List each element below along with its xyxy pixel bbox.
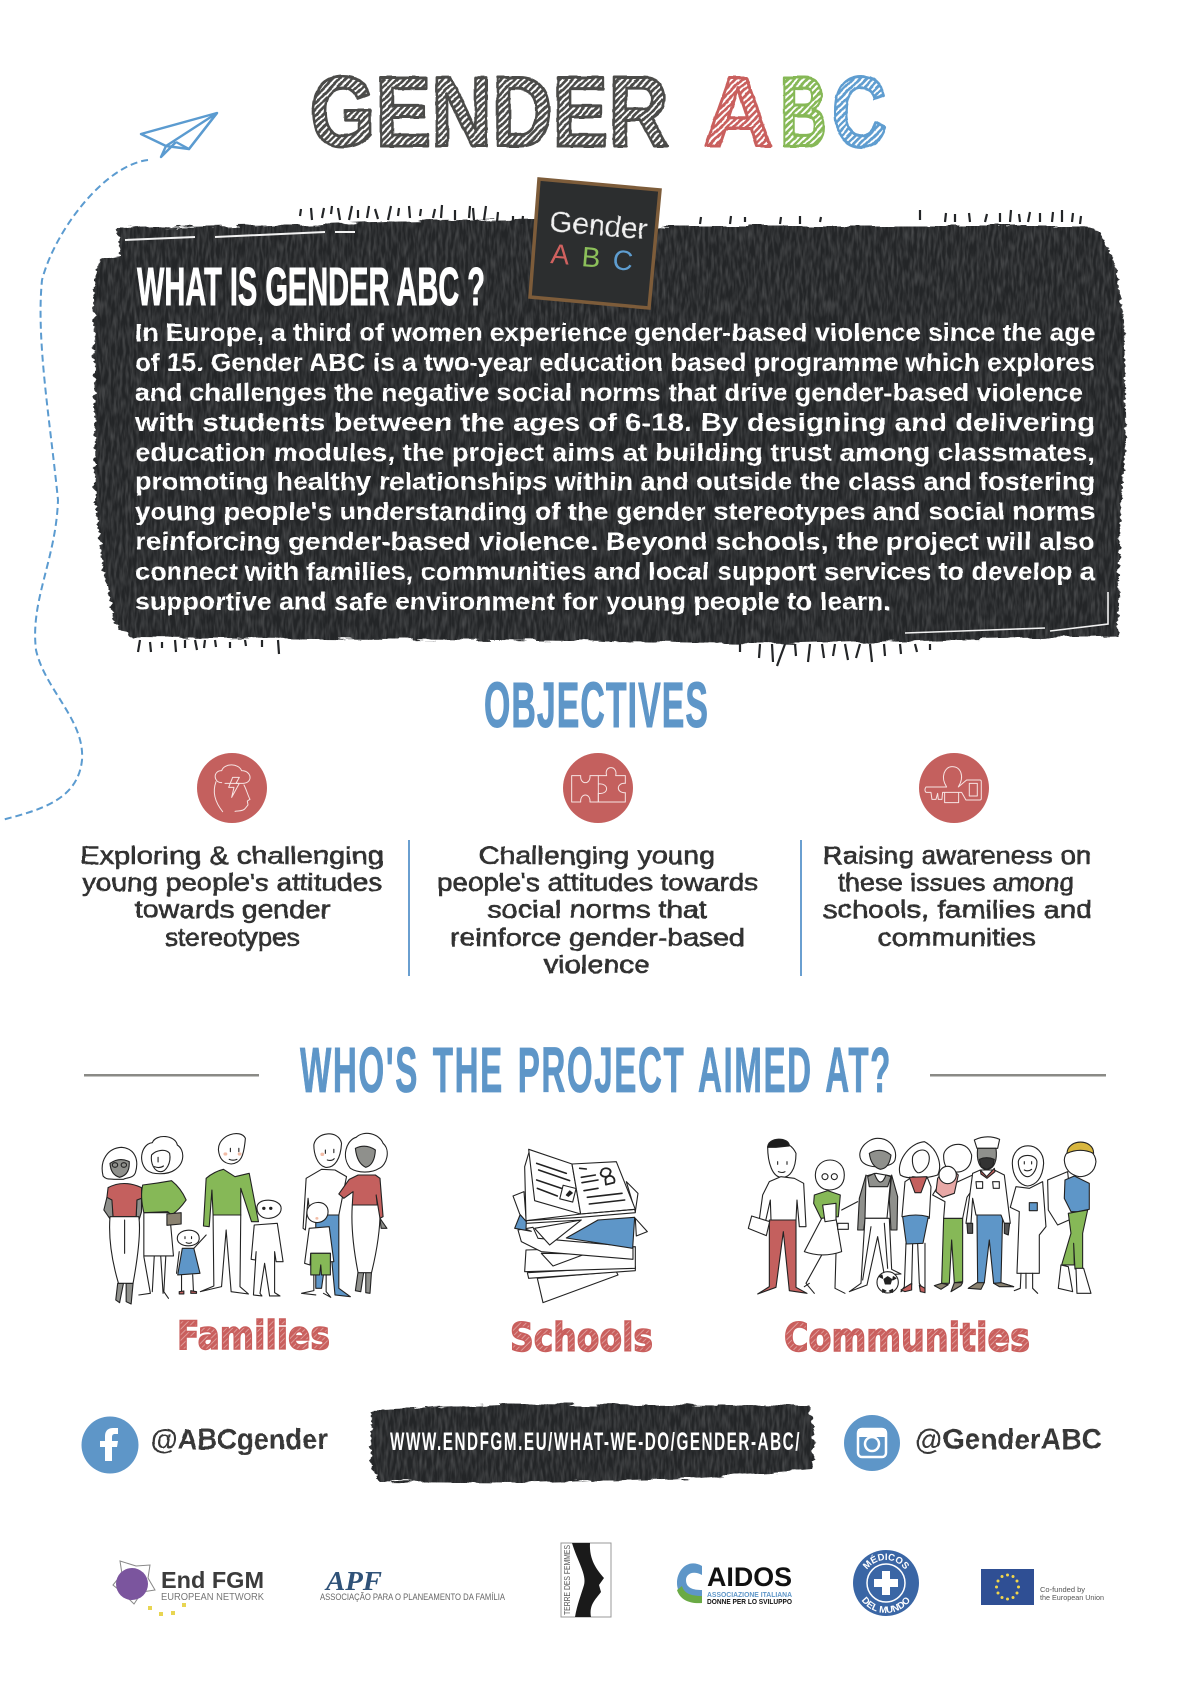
open book xyxy=(525,1149,635,1223)
woman with curly hair xyxy=(139,1137,186,1298)
objective text 1: Exploring & challenging xyxy=(80,842,384,870)
body paragraph: promoting healthy relationships within and outside the class and fostering xyxy=(135,468,1095,496)
man with tablet xyxy=(748,1139,807,1294)
body paragraph xyxy=(134,319,1096,616)
logo: aidos xyxy=(677,1562,793,1606)
body paragraph: connect with families, communities and local support services to develop a xyxy=(135,558,1096,586)
body paragraph: education modules, the project aims at building trust among classmates, xyxy=(135,439,1095,467)
label: communities: Communities xyxy=(784,1316,1030,1361)
objective text 1: young people's attitudes xyxy=(82,869,382,897)
tall man in green xyxy=(200,1134,258,1294)
chalk scratches xyxy=(125,232,1108,633)
panel: chalkboard what is gender abc xyxy=(94,205,1126,666)
lower book stack xyxy=(518,1227,635,1303)
logo: apf: APF xyxy=(324,1566,382,1596)
website url: WWW.ENDFGM.EU/WHAT-WE-DO/GENDER-ABC/ xyxy=(390,1428,801,1456)
icon: puzzle pieces xyxy=(563,753,633,823)
sign letter: A: A xyxy=(549,238,571,271)
heading: what is gender abc: WHAT IS GENDER ABC ? xyxy=(137,257,485,317)
divider xyxy=(408,840,410,976)
logo: apf xyxy=(320,1566,506,1603)
ragged chalk streaks xyxy=(138,205,1081,666)
sign letter: B: B xyxy=(580,241,602,274)
body paragraph: young people's understanding of the gender stereotypes and social norms xyxy=(135,498,1095,526)
woman in hijab xyxy=(1010,1146,1046,1293)
logo: apf: ASSOCIAÇÃO PARA O PLANEAMENTO DA FAMÍLIA xyxy=(320,1592,506,1603)
objective text 3: Raising awareness on xyxy=(823,842,1091,870)
logo: eu flag: Co-funded by xyxy=(1040,1585,1085,1594)
woman with glasses xyxy=(102,1147,142,1304)
title letter: B: B xyxy=(780,56,827,167)
label: schools: Schools xyxy=(510,1316,653,1361)
logo: medicos del mundo: MÉDICOS xyxy=(862,1554,909,1570)
title letter: A: A xyxy=(703,56,773,167)
label: families: Families xyxy=(177,1314,330,1359)
objective text 3 xyxy=(823,842,1092,952)
sign frame xyxy=(530,179,660,308)
board background xyxy=(94,219,1126,644)
title word: GENDER: GENDER xyxy=(310,56,669,167)
boy xyxy=(251,1200,283,1296)
uniformed officer xyxy=(966,1137,1014,1289)
objective text 3: schools, families and xyxy=(823,896,1092,924)
logo: aidos: ASSOCIAZIONE ITALIANA xyxy=(707,1592,792,1599)
logo: medicos del mundo xyxy=(853,1550,919,1616)
objective text 2 xyxy=(437,842,758,979)
objective text 1: towards gender xyxy=(135,896,330,924)
icon: facebook xyxy=(82,1416,138,1474)
father in white shirt xyxy=(303,1134,350,1297)
body paragraph: of 15. Gender ABC is a two-year education based programme which explores xyxy=(135,349,1095,377)
objective text 1: stereotypes xyxy=(165,924,300,952)
dashed flight path xyxy=(2,160,148,820)
objective text 1 xyxy=(80,842,384,952)
objective text 2: Challenging young xyxy=(479,842,715,870)
body paragraph: with students between the ages of 6-18. By designing and delivering xyxy=(134,409,1095,437)
sign letter: C: C xyxy=(611,244,634,277)
logo: eu flag xyxy=(981,1569,1104,1605)
handle: facebook: @ABCgender xyxy=(151,1424,328,1456)
body paragraph: In Europe, a third of women experience gender-based violence since the age xyxy=(135,319,1095,347)
heading: objectives: OBJECTIVES xyxy=(484,669,709,741)
objective text 3: communities xyxy=(878,924,1036,952)
logo: eu flag: the European Union xyxy=(1040,1593,1104,1602)
banner brush shape xyxy=(370,1404,814,1483)
illustration: communities xyxy=(748,1137,1096,1294)
body paragraph: reinforcing gender-based violence. Beyond schools, the project will also xyxy=(135,528,1095,556)
blue book cover xyxy=(515,1215,635,1248)
athlete with ball xyxy=(849,1138,901,1293)
icon: instagram xyxy=(844,1415,900,1471)
objective text 2: social norms that xyxy=(487,896,707,924)
illustration: schools books xyxy=(513,1149,647,1303)
sign word: Gender: Gender xyxy=(548,205,649,247)
objective text 2: reinforce gender-based xyxy=(450,924,745,952)
divider xyxy=(800,840,802,976)
illustration: families xyxy=(102,1133,387,1304)
title: Gender ABC xyxy=(310,56,887,167)
handle: instagram: @GenderABC xyxy=(915,1424,1102,1456)
carer holding baby xyxy=(933,1144,974,1292)
body paragraph: and challenges the negative social norms that drive gender-based violence xyxy=(135,379,1083,407)
woman in blue skirt xyxy=(899,1142,940,1293)
objective text 3: these issues among xyxy=(838,869,1074,897)
objective text 2: violence xyxy=(544,951,650,979)
small blackboard sign xyxy=(530,179,660,308)
logo: aidos: DONNE PER LO SVILUPPO xyxy=(707,1599,793,1606)
loose papers xyxy=(513,1182,647,1245)
logo: aidos: AIDOS xyxy=(707,1562,792,1592)
logo: terre des femmes: TERRE DES FEMMES xyxy=(563,1545,572,1615)
objective text 2: people's attitudes towards xyxy=(437,869,758,897)
logo: terre des femmes xyxy=(561,1543,611,1617)
body paragraph: supportive and safe environment for young people to learn. xyxy=(135,588,891,616)
logo: medicos del mundo: DEL MUNDO xyxy=(862,1596,910,1614)
logo: end fgm: End FGM xyxy=(161,1567,264,1593)
little girl xyxy=(177,1230,206,1294)
title letter: C: C xyxy=(832,56,887,167)
hiker with backpack xyxy=(1048,1142,1096,1293)
icon: paper airplane xyxy=(141,113,217,157)
woman with glasses and dress xyxy=(804,1160,858,1293)
woman in red xyxy=(339,1133,387,1293)
boy with green shorts xyxy=(302,1202,334,1297)
website banner xyxy=(370,1404,814,1483)
icon: head with storm cloud xyxy=(197,753,267,823)
logo: end fgm: EUROPEAN NETWORK xyxy=(161,1591,264,1603)
logo: end fgm xyxy=(113,1561,264,1616)
icon: key xyxy=(919,753,989,823)
